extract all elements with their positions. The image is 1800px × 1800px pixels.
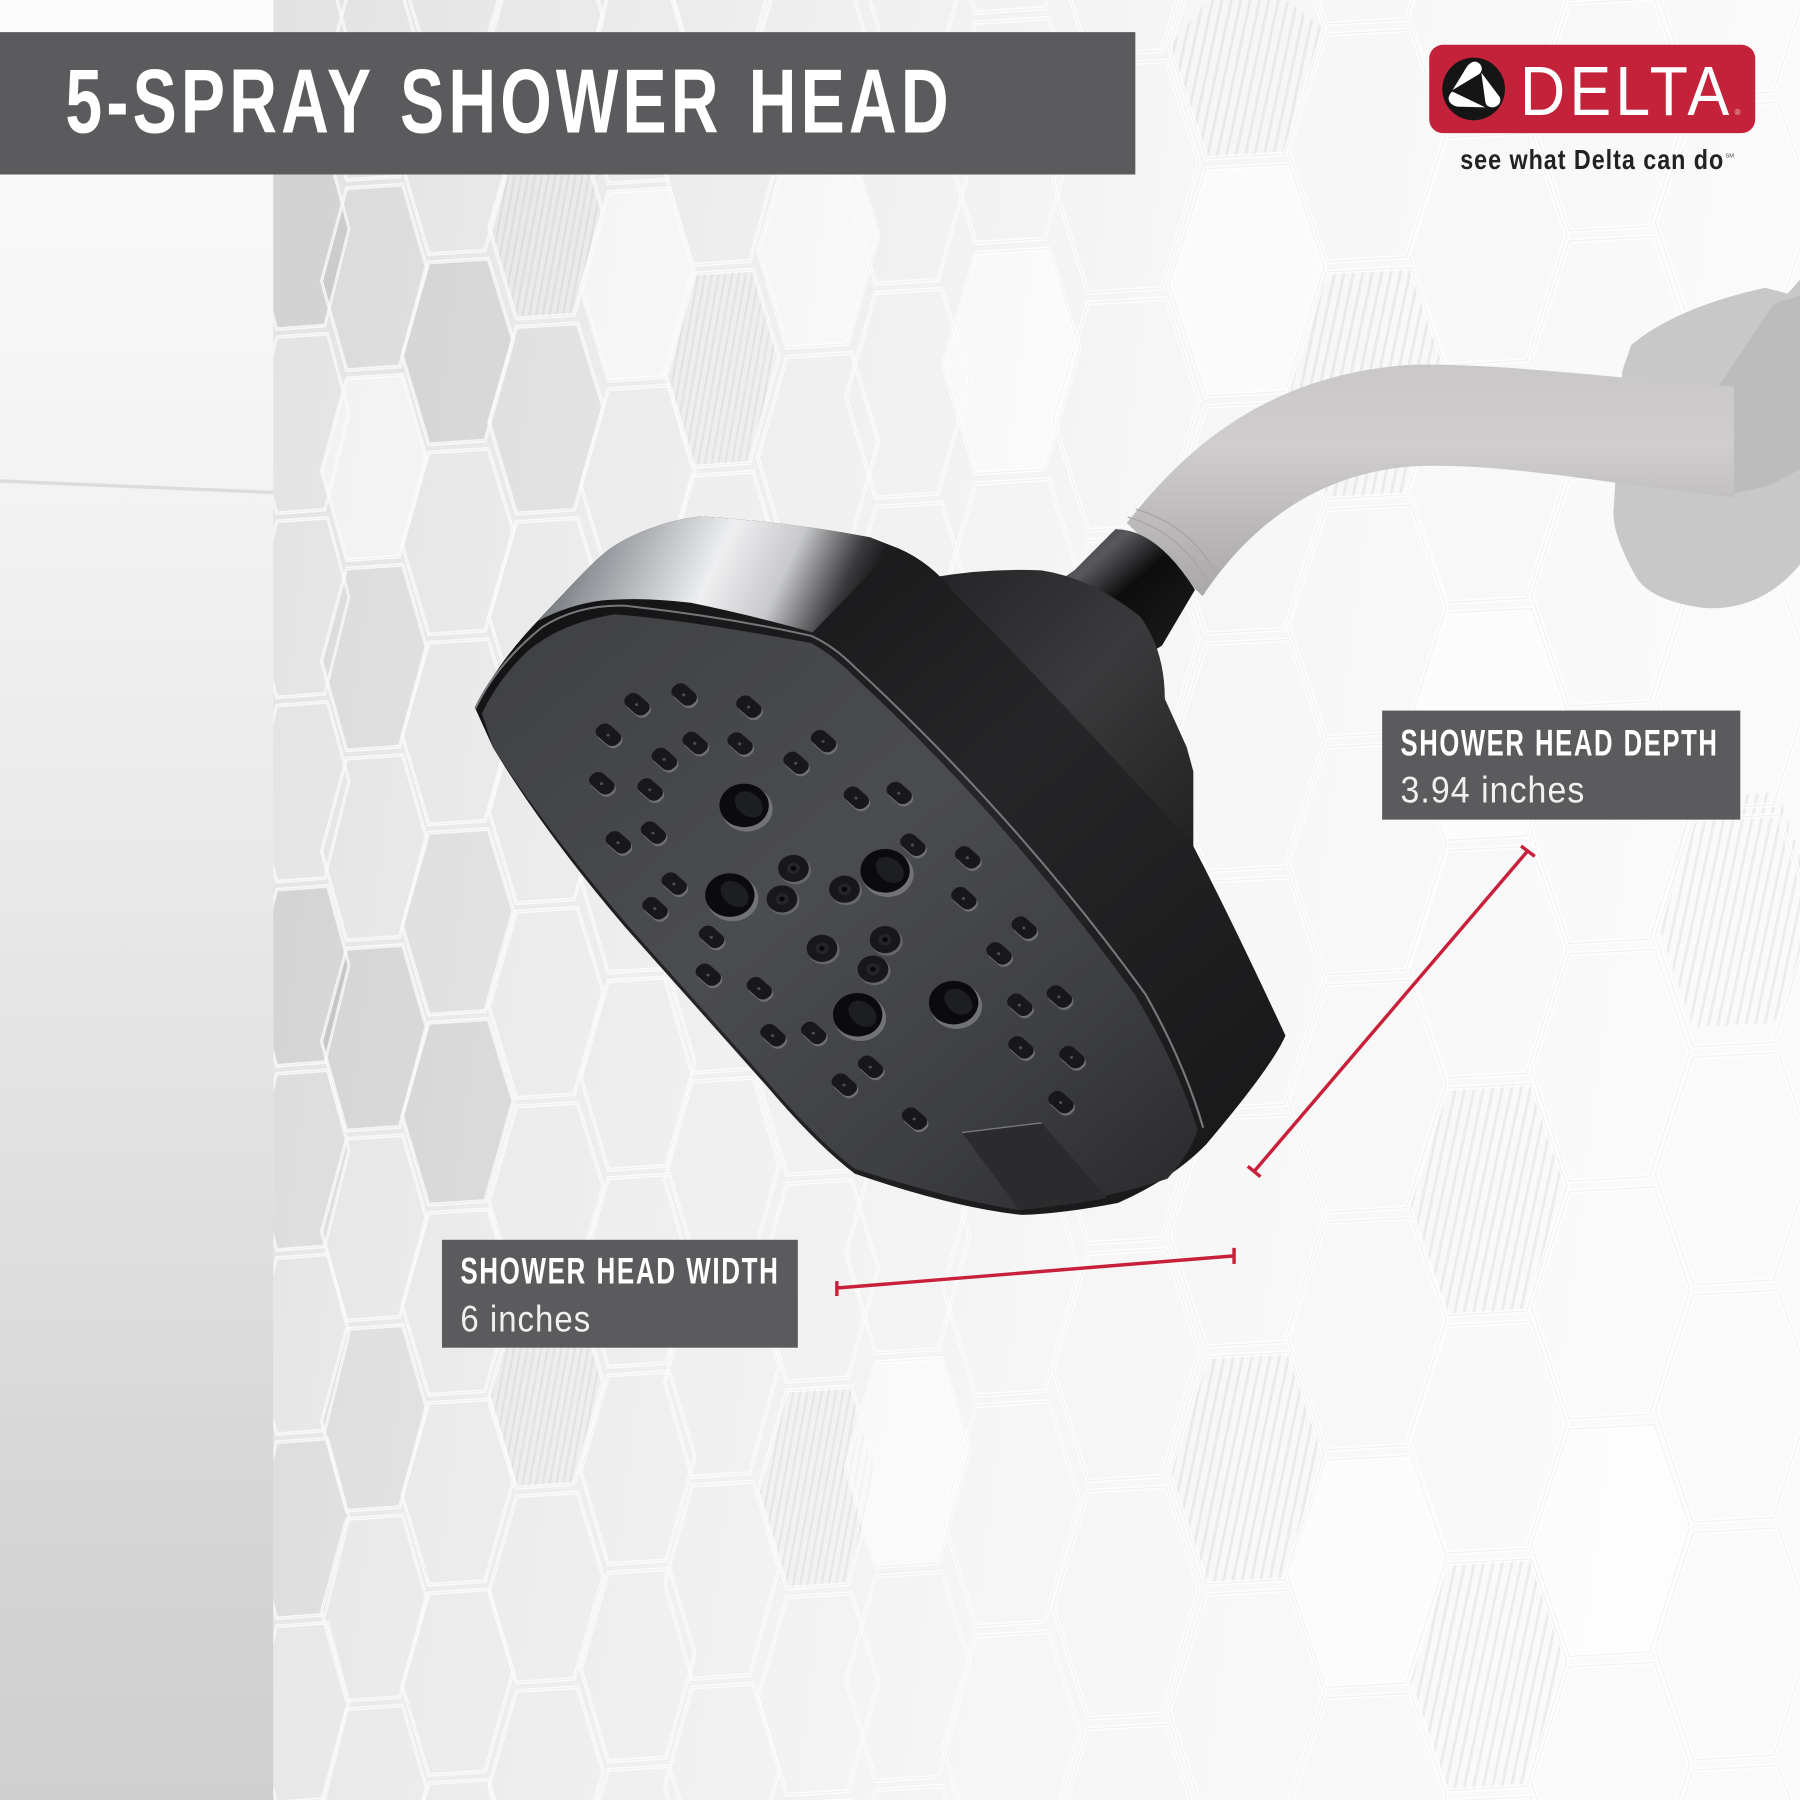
callout: shower head depth (1382, 711, 1740, 820)
striped tiles (489, 0, 1800, 1791)
dark marble tiles (254, 149, 513, 1205)
flange hexagonal boss (1718, 296, 1800, 497)
registered mark: ® (1735, 108, 1741, 117)
depth dimension line (1248, 846, 1535, 1177)
threaded ring (1128, 509, 1215, 580)
logo wordmark: DELTA (1520, 52, 1733, 130)
width value: 6 inches (460, 1299, 591, 1340)
outer body (475, 517, 1285, 1215)
curved arm (1127, 365, 1734, 596)
chrome top band (537, 517, 893, 632)
callout: shower head width (442, 1240, 798, 1348)
logo red badge (1429, 45, 1755, 133)
depth value: 3.94 inches (1401, 769, 1585, 810)
width label: SHOWER HEAD WIDTH (460, 1250, 779, 1291)
face plate (482, 614, 1198, 1210)
black collar (1036, 529, 1195, 670)
Delta logo (1429, 45, 1755, 175)
round nozzles (767, 855, 903, 985)
left plain wall strip (0, 0, 273, 1800)
textured tiles (322, 146, 1690, 1687)
tagline: see what Delta can do (1460, 144, 1724, 175)
title text: 5-SPRAY SHOWER HEAD (65, 52, 953, 153)
width dimension line (837, 1248, 1234, 1296)
strip horizontal joint (0, 481, 273, 492)
flip switch highlight (962, 1123, 1041, 1133)
face rim highlight (475, 606, 1203, 1128)
pill spray nozzles (586, 680, 1089, 1135)
wall flange (1613, 280, 1800, 608)
rear cup (844, 570, 1193, 936)
shower head (475, 517, 1285, 1215)
shower arm and wall flange (1127, 280, 1800, 608)
lighter marble tiles (254, 185, 603, 1618)
logo emblem (1442, 58, 1505, 120)
title banner (0, 32, 1135, 174)
large spray holes (705, 784, 982, 1041)
flip switch (962, 1123, 1107, 1210)
service mark: SM (1725, 153, 1734, 159)
